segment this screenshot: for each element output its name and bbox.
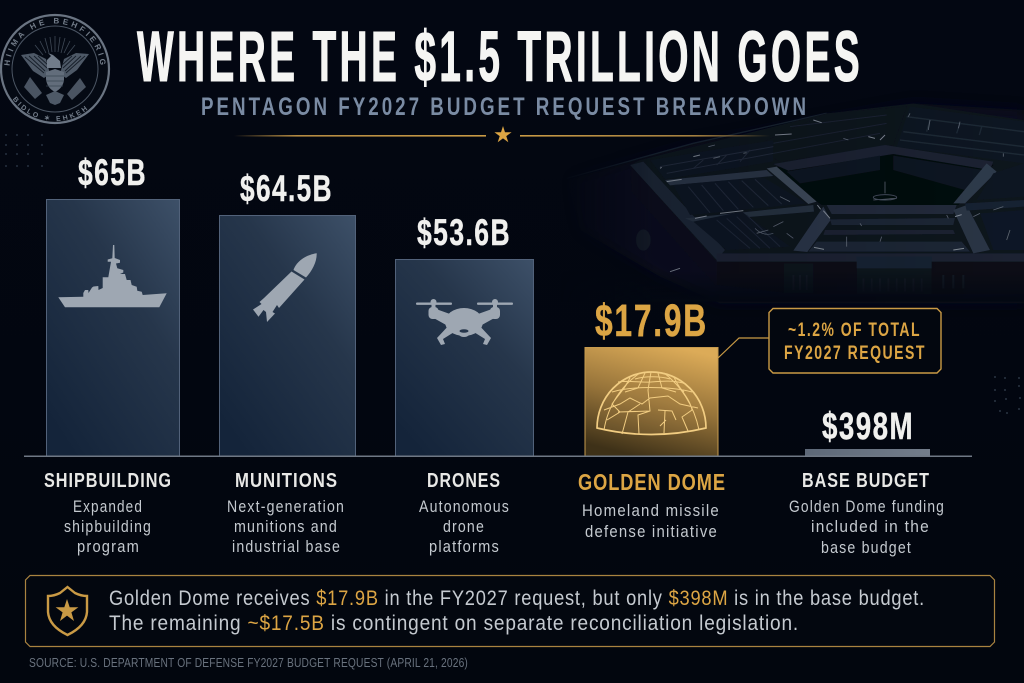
icon: shield with star <box>48 587 87 635</box>
description: shipbuilding <box>64 517 152 536</box>
title divider with star <box>234 126 770 142</box>
value: $53.6B <box>417 212 511 253</box>
description <box>582 501 720 541</box>
bar <box>585 348 718 456</box>
seal lettering: BIDLO ✶ EHKEH <box>12 96 88 122</box>
seal eagle <box>21 36 89 105</box>
bar <box>46 200 180 456</box>
description: program <box>77 537 140 556</box>
column: shipbuilding <box>44 152 180 556</box>
icon: drone <box>416 299 513 345</box>
description: platforms <box>429 537 500 556</box>
callout: share of total <box>718 308 941 373</box>
description <box>227 497 345 556</box>
icon: missile <box>253 253 317 322</box>
description: defense initiative <box>585 522 718 541</box>
bar <box>396 260 534 456</box>
description: drone <box>443 517 485 536</box>
callout text: ~1.2% OF TOTAL <box>788 320 921 341</box>
column: munitions <box>220 168 356 556</box>
bar <box>805 449 930 457</box>
image: Pentagon aerial view <box>592 104 1024 291</box>
seal lettering <box>4 18 106 122</box>
category label: BASE BUDGET <box>802 470 930 492</box>
column: golden dome <box>578 295 726 541</box>
dot grid top left <box>5 134 43 167</box>
value: $65B <box>78 152 147 193</box>
callout: share of total: FY2027 REQUEST <box>784 343 926 364</box>
category label: DRONES <box>427 470 501 492</box>
description: Homeland missile <box>582 501 720 520</box>
description: Expanded <box>73 497 143 516</box>
subtitle: PENTAGON FY2027 BUDGET REQUEST BREAKDOWN <box>201 93 809 121</box>
category label: SHIPBUILDING <box>44 470 172 492</box>
description: included in the <box>811 517 930 536</box>
description: base budget <box>821 538 912 557</box>
column: drones <box>396 212 534 556</box>
bar <box>220 216 356 456</box>
decorative seal <box>0 14 110 124</box>
source line: SOURCE: U.S. DEPARTMENT OF DEFENSE FY2027 BUDGET REQUEST (APRIL 21, 2026) <box>29 655 468 670</box>
description <box>64 497 152 556</box>
baseline axis <box>24 456 972 457</box>
column: base budget <box>789 406 945 557</box>
description: munitions and <box>234 517 338 536</box>
note text: Golden Dome receives $17.9B in the FY2027 request, but only $398M is in the base budget. <box>109 587 925 610</box>
description: industrial base <box>232 537 341 556</box>
note panel <box>26 576 994 646</box>
panel border <box>26 576 994 646</box>
value: $64.5B <box>240 168 333 209</box>
category label: GOLDEN DOME <box>578 469 726 495</box>
category label: MUNITIONS <box>235 470 338 492</box>
description: Golden Dome funding <box>789 497 945 516</box>
description <box>789 497 945 557</box>
description: Autonomous <box>419 497 510 516</box>
description: Next-generation <box>227 497 345 516</box>
icon: dome <box>597 372 706 434</box>
dot grid right <box>994 376 1021 414</box>
description <box>419 497 510 556</box>
connector <box>718 338 769 358</box>
note panel: The remaining ~$17.5B is contingent on separate reconciliation legislation. <box>109 612 799 635</box>
value: $17.9B <box>595 295 708 346</box>
value: $398M <box>822 406 914 448</box>
icon: ship <box>58 245 167 307</box>
callout box <box>769 308 941 373</box>
seal lettering: HIIMA HE BEHFIERIG <box>4 18 106 66</box>
